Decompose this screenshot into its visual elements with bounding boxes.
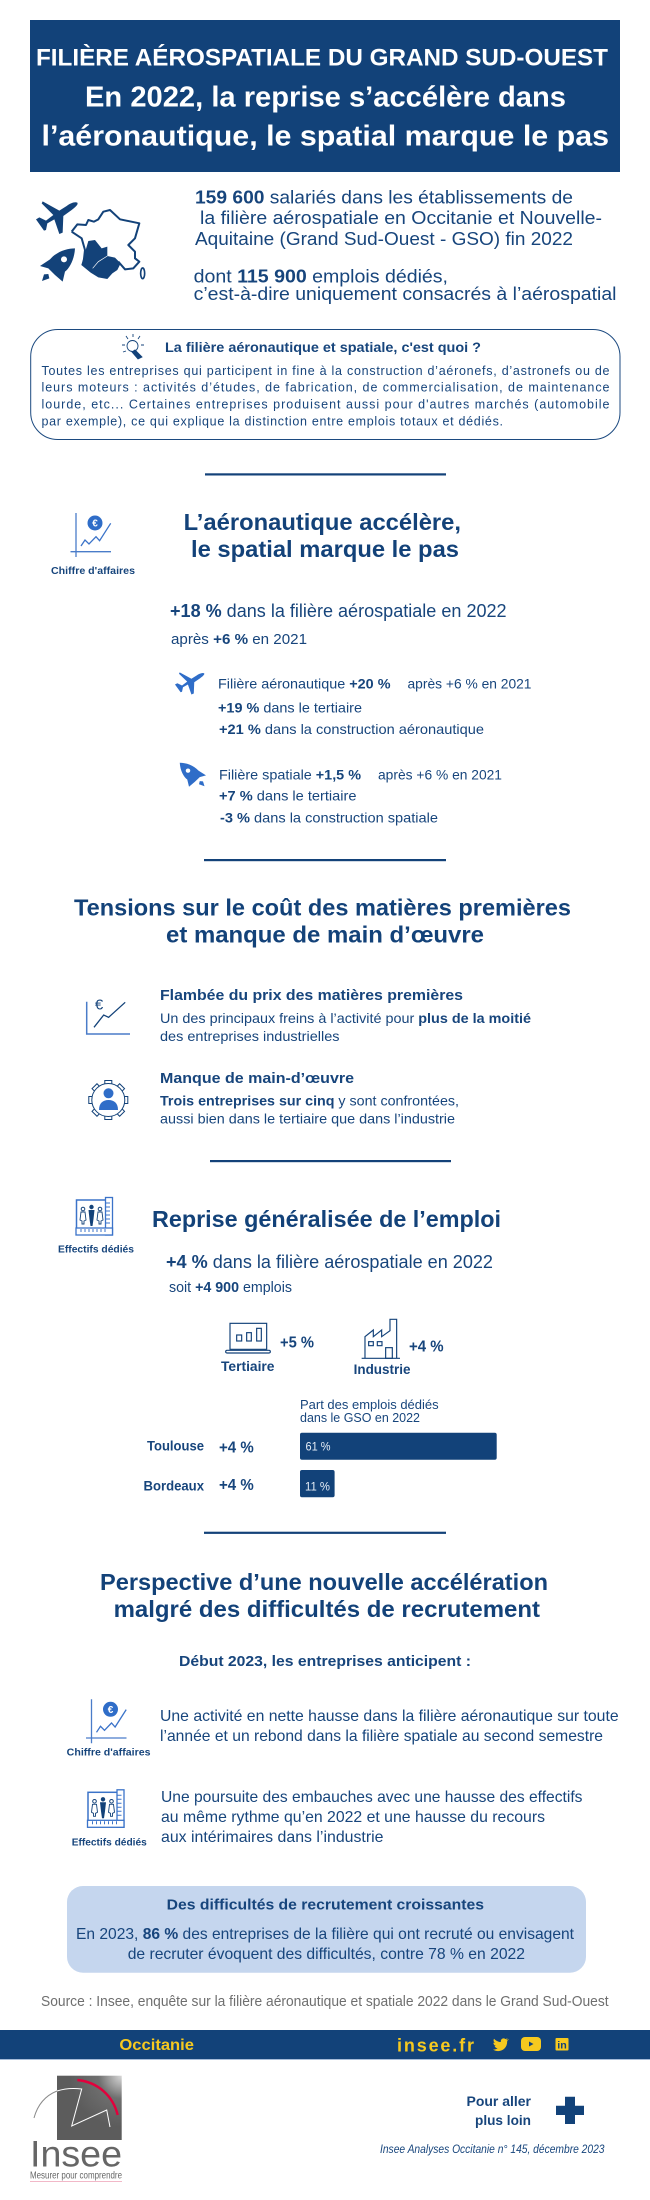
bar chart: share of dedicated jobs: Toulouse	[147, 1439, 204, 1454]
raw materials text: Un des principaux freins à l’activité pour plus de la moitié	[160, 1010, 531, 1026]
icon: plane	[175, 672, 204, 694]
panel: recruitment difficulties: En 2023, 86 % des entreprises de la filière qui ont recruté ou envisagent	[76, 1926, 575, 1943]
bar chart: share of dedicated jobs: Bordeaux	[144, 1479, 204, 1494]
callout body text: leurs moteurs : activités d’études, de fabrication, de commercialisation, de maintenance	[42, 381, 610, 395]
icon: euro price chart: €	[95, 996, 104, 1014]
raw materials text: Flambée du prix des matières premières	[160, 987, 463, 1004]
heading	[100, 1569, 548, 1622]
headline figures: +18 % dans la filière aérospatiale en 2022	[170, 601, 507, 621]
callout body text: lourde, etc... Certaines entreprises produisent aussi pour d'autres marchés (automobile	[42, 398, 610, 412]
icon: dedicated workforce	[76, 1198, 112, 1235]
industry figure: Industrie	[354, 1362, 411, 1377]
section: tensions	[74, 895, 571, 1126]
space figures	[219, 766, 502, 825]
heading	[74, 895, 571, 948]
bar chart: share of dedicated jobs: dans le GSO en 2022	[300, 1411, 420, 1425]
space figures: +7 % dans le tertiaire	[219, 787, 357, 803]
icon: turnover chart	[70, 513, 111, 557]
workforce text: Trois entreprises sur cinq y sont confrontées,	[160, 1092, 459, 1108]
hiring outlook text: aux intérimaires dans l’industrie	[161, 1829, 384, 1846]
callout body text: Toutes les entreprises qui participent in fine à la construction d’aéronefs, d’astronefs ou de	[42, 364, 610, 378]
icon: youtube	[521, 2037, 541, 2051]
further reading call to action: plus loin	[475, 2113, 531, 2128]
key figures intro: dont 115 900 emplois dédiés,	[194, 265, 448, 286]
bar chart: share of dedicated jobs	[144, 1398, 497, 1497]
icon: twitter	[493, 2038, 509, 2051]
icon: laptop	[226, 1323, 270, 1353]
icon: turnover chart: €	[92, 518, 98, 530]
icon: euro price chart	[87, 996, 130, 1034]
logo: Insee: Insee	[30, 2134, 122, 2175]
bar chart: share of dedicated jobs: +4 %	[219, 1477, 254, 1494]
icon: turnover chart: €	[108, 1705, 114, 1716]
title banner: En 2022, la reprise s’accélère dans	[85, 82, 566, 114]
icon: factory	[362, 1319, 400, 1358]
tertiary figure: +5 %	[280, 1335, 314, 1352]
panel: definition callout	[31, 330, 620, 440]
raw materials text	[160, 987, 531, 1044]
section: perspectives	[67, 1569, 619, 1973]
key figures intro: la filière aérospatiale en Occitanie et Nouvelle-	[200, 207, 602, 228]
industry figure	[354, 1339, 444, 1377]
aeronautics figures: après +6 % en 2021	[408, 675, 532, 691]
icon: gear with person	[89, 1080, 128, 1120]
headline figures: après +6 % en 2021	[171, 631, 307, 648]
section: chiffre d'affaires	[51, 509, 532, 825]
heading: Tensions sur le coût des matières premières	[74, 895, 571, 921]
footer band	[0, 2030, 650, 2060]
panel: recruitment difficulties: Des difficultés de recrutement croissantes	[167, 1896, 484, 1913]
bar chart: share of dedicated jobs: +4 %	[219, 1439, 254, 1456]
aeronautics figures: +21 % dans la construction aéronautique	[219, 721, 484, 737]
logo: Insee	[30, 2076, 122, 2182]
icon: light bulb	[122, 334, 144, 359]
callout heading: La filière aéronautique et spatiale, c'est quoi ?	[165, 339, 481, 355]
heading	[184, 509, 461, 562]
title banner: FILIÈRE AÉROSPATIALE DU GRAND SUD-OUEST	[36, 44, 608, 72]
source note: Source : Insee, enquête sur la filière aéronautique et spatiale 2022 dans le Grand Sud-Ouest	[41, 1994, 609, 2010]
further reading call to action: Pour aller	[466, 2094, 532, 2109]
heading: Perspective d’une nouvelle accélération	[100, 1569, 548, 1595]
icon: rocket	[180, 763, 206, 787]
space figures: -3 % dans la construction spatiale	[220, 809, 438, 825]
icon: plane, rocket and map of France	[36, 201, 145, 282]
bar chart: share of dedicated jobs: 61 %	[306, 1442, 330, 1454]
headline figures: +4 % dans la filière aérospatiale en 2022	[166, 1252, 493, 1272]
raw materials text: des entreprises industrielles	[160, 1028, 340, 1044]
industry figure: +4 %	[409, 1339, 444, 1356]
space figures: Filière spatiale +1,5 %	[219, 766, 362, 782]
logo: Insee: Mesurer pour comprendre	[30, 2170, 122, 2182]
heading: Reprise généralisée de l’emploi	[152, 1206, 501, 1232]
headline figures: soit +4 900 emplois	[169, 1280, 292, 1296]
key figures intro: 159 600 salariés dans les établissements de	[195, 186, 573, 207]
icon: linkedin	[556, 2038, 568, 2052]
headline figures	[166, 1252, 493, 1296]
callout body text	[42, 364, 610, 429]
icon label: Effectifs dédiés	[58, 1244, 134, 1256]
title banner	[30, 20, 620, 172]
icon label: Chiffre d'affaires	[51, 565, 135, 577]
aeronautics figures	[218, 675, 532, 737]
space figures: après +6 % en 2021	[378, 766, 502, 782]
aeronautics figures: Filière aéronautique +20 %	[218, 675, 391, 691]
hiring outlook text: au même rythme qu’en 2022 et une hausse du recours	[161, 1809, 545, 1826]
icon: dedicated workforce	[88, 1790, 124, 1827]
title banner: l’aéronautique, le spatial marque le pas	[42, 121, 609, 153]
heading: le spatial marque le pas	[191, 536, 459, 562]
section: emploi	[58, 1198, 501, 1497]
workforce text: Manque de main-d’œuvre	[160, 1070, 354, 1087]
key figures intro: Aquitaine (Grand Sud-Ouest - GSO) fin 2022	[195, 228, 573, 249]
icon: linkedin: in	[557, 2040, 567, 2052]
further reading call to action	[466, 2094, 584, 2128]
heading: malgré des difficultés de recrutement	[114, 1596, 540, 1622]
workforce text	[160, 1070, 459, 1126]
icon: turnover chart	[86, 1699, 126, 1743]
heading: et manque de main d’œuvre	[166, 922, 484, 948]
panel: recruitment difficulties: de recruter évoquent des difficultés, contre 78 % en 2022	[128, 1946, 525, 1963]
callout body text: par exemple), ce qui explique la distinction entre emplois totaux et dédiés.	[42, 415, 503, 429]
panel: recruitment difficulties	[67, 1886, 586, 1973]
footer band: Occitanie	[119, 2037, 194, 2054]
subheading: Début 2023, les entreprises anticipent :	[179, 1653, 471, 1670]
workforce text: aussi bien dans le tertiaire que dans l’industrie	[160, 1110, 455, 1126]
key figures intro: c’est-à-dire uniquement consacrés à l’aérospatial	[194, 283, 616, 304]
bar chart: share of dedicated jobs: Part des emplois dédiés	[300, 1398, 439, 1412]
hiring outlook text	[161, 1789, 582, 1846]
aeronautics figures: +19 % dans le tertiaire	[218, 699, 362, 715]
icon label: Effectifs dédiés	[72, 1837, 147, 1849]
headline figures	[170, 601, 507, 648]
key figures intro	[194, 186, 616, 304]
bar chart: share of dedicated jobs: 11 %	[305, 1482, 330, 1494]
activity outlook text	[160, 1708, 619, 1745]
tertiary figure	[221, 1335, 314, 1374]
heading: L’aéronautique accélère,	[184, 509, 461, 535]
activity outlook text: l’année et un rebond dans la filière spatiale au second semestre	[160, 1728, 603, 1745]
footer band: insee.fr	[397, 2036, 474, 2056]
hiring outlook text: Une poursuite des embauches avec une hausse des effectifs	[161, 1789, 582, 1806]
icon: plus	[556, 2097, 584, 2124]
publication reference: Insee Analyses Occitanie n° 145, décembre 2023	[380, 2144, 605, 2156]
tertiary figure: Tertiaire	[221, 1359, 275, 1374]
icon label: Chiffre d'affaires	[67, 1747, 151, 1759]
activity outlook text: Une activité en nette hausse dans la filière aéronautique sur toute	[160, 1708, 619, 1725]
